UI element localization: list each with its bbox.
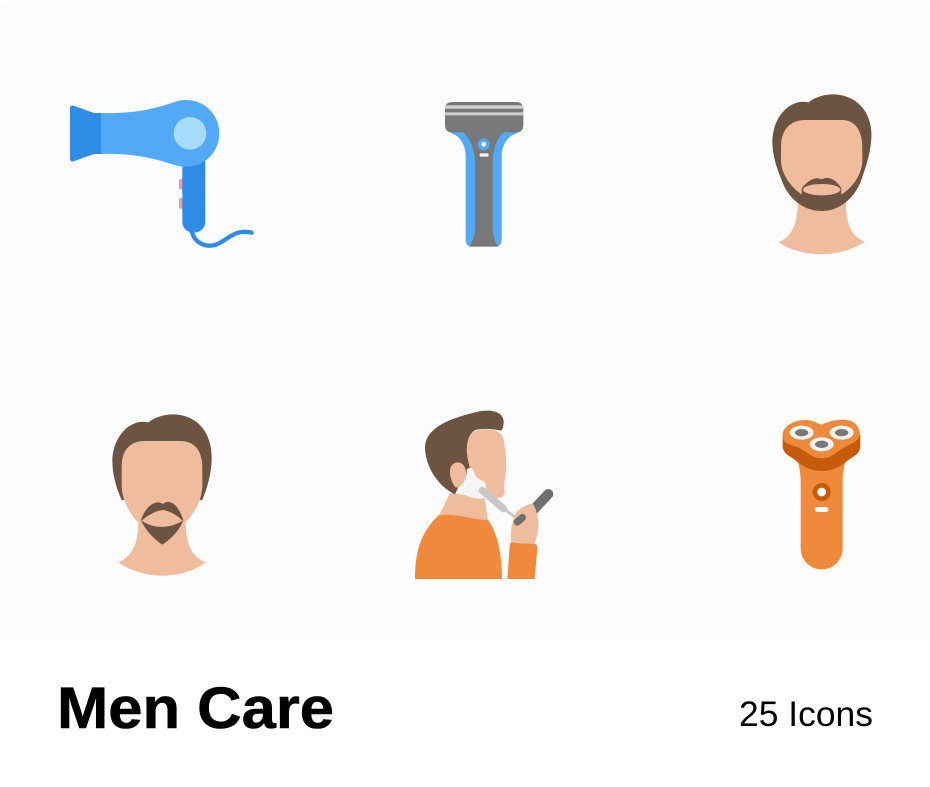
buttons xyxy=(179,179,184,209)
hair xyxy=(425,411,504,494)
icon: man with full beard xyxy=(772,94,871,254)
icon: electric shaver xyxy=(783,420,860,569)
body xyxy=(415,515,502,579)
neck xyxy=(778,202,865,254)
cord xyxy=(192,232,252,246)
hand xyxy=(511,504,539,545)
icon: man shaving xyxy=(415,411,548,579)
indicator bar xyxy=(480,153,489,157)
indicator bar xyxy=(815,507,828,512)
goatee and moustache xyxy=(141,502,183,545)
face xyxy=(781,120,862,195)
sleeve xyxy=(507,542,537,579)
neck xyxy=(118,522,206,576)
head side xyxy=(783,435,860,471)
hair xyxy=(112,414,212,500)
ear xyxy=(450,462,466,487)
face xyxy=(122,441,202,533)
cutters xyxy=(790,426,854,451)
power button xyxy=(813,483,831,501)
shaver body xyxy=(797,457,847,569)
power button xyxy=(478,138,490,150)
body xyxy=(101,100,219,167)
blue handle xyxy=(449,133,519,247)
icon count: 25 Icons xyxy=(739,695,873,734)
icon: hair dryer xyxy=(70,100,252,246)
mouth xyxy=(142,510,183,527)
face xyxy=(462,429,506,498)
moustache and beard top xyxy=(802,178,841,202)
head top xyxy=(783,420,860,458)
air vent circle xyxy=(174,117,206,150)
grey centre xyxy=(463,133,503,247)
title: Men Care xyxy=(57,676,334,741)
hair and beard xyxy=(772,94,871,211)
mouth xyxy=(803,184,840,195)
icon: razor xyxy=(445,102,523,247)
icon: man with goatee xyxy=(112,414,212,576)
nozzle xyxy=(70,105,101,162)
razor handle end xyxy=(517,518,522,522)
blades xyxy=(445,105,523,115)
razor handle xyxy=(533,494,548,510)
razor blade xyxy=(482,490,517,518)
razor head xyxy=(445,102,523,133)
shaving foam xyxy=(461,468,488,499)
handle xyxy=(182,160,205,233)
neck xyxy=(438,493,488,522)
